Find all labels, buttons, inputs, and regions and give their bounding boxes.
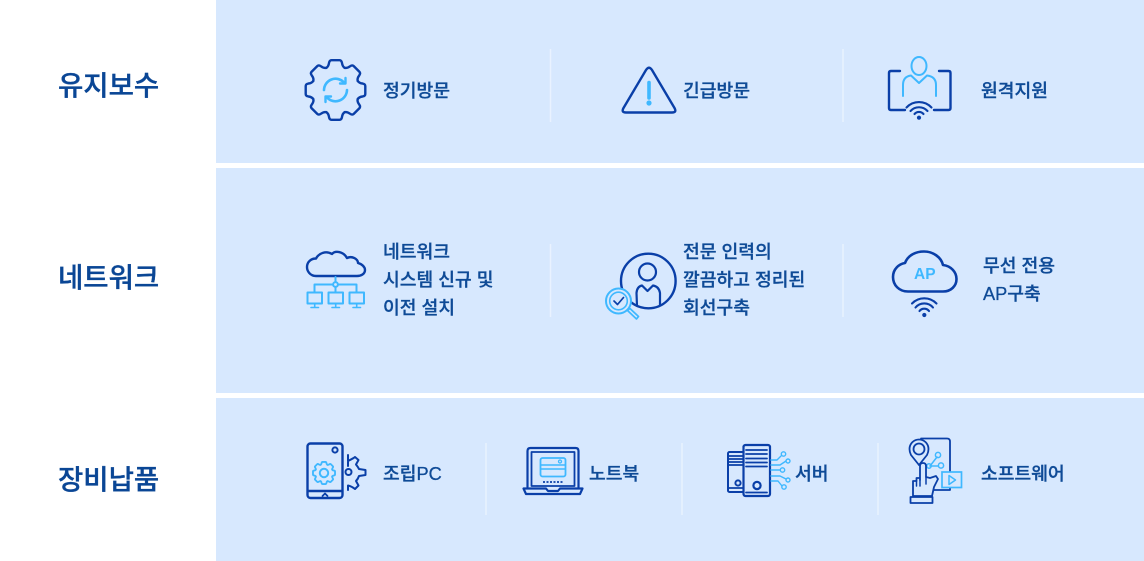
label: 전문 인력의 깔끔하고 정리된 회선구축: 전문 인력의 xyxy=(683,242,772,262)
label: 네트워크 시스템 신규 및 이전 설치: 시스템 신규 및 xyxy=(383,270,494,290)
label: 전문 인력의 깔끔하고 정리된 회선구축: 회선구축 xyxy=(683,298,750,318)
label: 네트워크 시스템 신규 및 이전 설치: 네트워크 xyxy=(383,242,450,262)
label: 무선 전용 AP구축 xyxy=(983,256,1055,304)
heading: 장비납품: 장비납품 xyxy=(58,457,159,497)
icon: gear with refresh arrows xyxy=(306,60,365,120)
label: 소프트웨어: 소프트웨어 xyxy=(981,464,1065,484)
icon: remote support person with wifi xyxy=(889,57,950,120)
label: 전문 인력의 깔끔하고 정리된 회선구축: 깔끔하고 정리된 xyxy=(683,270,805,290)
icon: expert with magnifier xyxy=(606,254,676,319)
panel: 네트워크 xyxy=(216,168,1144,393)
label: 무선 전용 AP구축: AP구축 xyxy=(983,284,1041,304)
icon: AP cloud with wifi xyxy=(893,252,956,317)
icon: cloud network xyxy=(307,252,365,308)
label: 네트워크 시스템 신규 및 이전 설치: 이전 설치 xyxy=(383,298,455,318)
label: 긴급방문: 긴급방문 xyxy=(683,81,750,101)
heading: 네트워크: 네트워크 xyxy=(58,255,159,295)
icon: software touch tablet xyxy=(910,438,962,503)
panel: 유지보수 xyxy=(216,0,1144,163)
label: 전문 인력의 깔끔하고 정리된 회선구축 xyxy=(683,242,805,318)
label: 정기방문: 정기방문 xyxy=(383,81,450,101)
label: 원격지원: 원격지원 xyxy=(981,81,1048,101)
icon: AP cloud with wifi: AP xyxy=(914,266,936,283)
icon: phone with gears xyxy=(308,444,366,498)
label: 서버: 서버 xyxy=(795,464,828,484)
label: 네트워크 시스템 신규 및 이전 설치 xyxy=(383,242,494,318)
heading: 유지보수: 유지보수 xyxy=(58,63,159,103)
icon: warning triangle xyxy=(623,68,675,112)
label: 노트북: 노트북 xyxy=(589,464,639,484)
label: 무선 전용 AP구축: 무선 전용 xyxy=(983,256,1055,276)
icon: servers xyxy=(728,445,790,496)
icon: laptop xyxy=(524,448,582,494)
panel: 장비납품 xyxy=(216,398,1144,561)
label: 조립PC: 조립PC xyxy=(383,464,442,484)
